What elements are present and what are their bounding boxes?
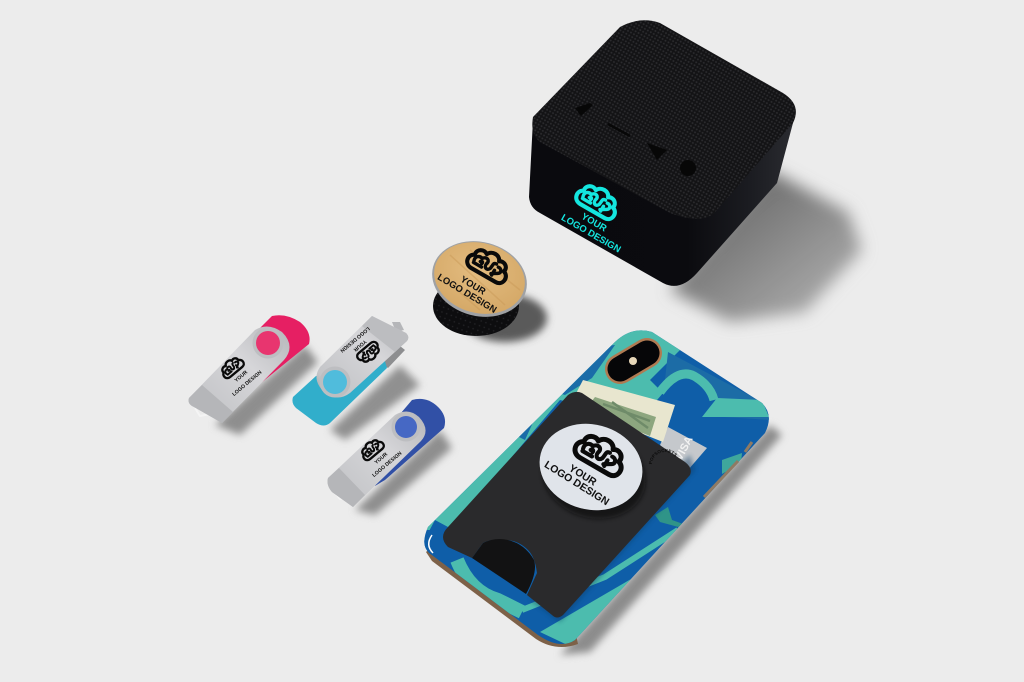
- teal key tab: [392, 322, 404, 332]
- blue body: [375, 399, 445, 486]
- pink label: YOUR: [234, 369, 249, 384]
- camera flash: [629, 357, 637, 365]
- phone case: [424, 330, 769, 644]
- white pop label: YOUR: [567, 462, 599, 489]
- speaker shadow: [670, 170, 862, 322]
- speaker buttons: [575, 103, 696, 176]
- blue label: YOUR: [374, 451, 389, 466]
- teal shadow: [330, 365, 420, 440]
- pink swivel: [189, 326, 290, 423]
- pop socket label: YOUR: [458, 274, 488, 298]
- speaker label: YOUR: [579, 211, 609, 235]
- white pop label: LOGO DESIGN: [542, 459, 611, 508]
- phone shadow: [560, 425, 782, 655]
- speaker body: [529, 120, 793, 286]
- blue key loop: [335, 493, 350, 499]
- pop socket base: [433, 276, 519, 336]
- speaker label: LOGO DESIGN: [559, 212, 623, 255]
- credit card: [660, 427, 707, 470]
- phone pop socket: [530, 412, 655, 530]
- blue logo: [358, 436, 385, 462]
- banknote paper: [570, 380, 675, 442]
- blue button: [395, 416, 417, 438]
- teal fold: [362, 316, 408, 352]
- teal button: [323, 370, 347, 394]
- blue button ring: [392, 412, 420, 442]
- wallet thumb slot: [472, 539, 535, 594]
- teal plug: [375, 342, 405, 368]
- blue label: LOGO DESIGN: [371, 451, 403, 479]
- USB drive: teal: [292, 316, 420, 440]
- money: [570, 380, 675, 442]
- card body: [660, 427, 707, 470]
- pink key loop: [195, 408, 210, 416]
- side buttons: [704, 442, 752, 497]
- pink label: LOGO DESIGN: [231, 370, 263, 398]
- teal label: LOGO DESIGN: [339, 325, 371, 353]
- pink fold: [189, 385, 233, 423]
- blue fold: [328, 468, 365, 507]
- pink logo: [218, 354, 245, 380]
- case pattern: [420, 325, 770, 650]
- phone edge: [426, 540, 578, 647]
- pink button ring: [252, 328, 284, 358]
- white pop logo: [572, 428, 630, 479]
- card wallet: [443, 392, 696, 624]
- USB drive: pink: [189, 315, 318, 435]
- white pop face: [530, 412, 652, 522]
- USB drive: blue: [328, 399, 452, 515]
- white pop shadow: [533, 422, 655, 530]
- banknote details: [603, 402, 650, 428]
- speaker mesh top: [532, 20, 796, 219]
- phone highlight: [429, 535, 433, 553]
- teal logo: [356, 340, 383, 366]
- pink shadow: [215, 345, 318, 435]
- camera lens housing: [620, 353, 647, 369]
- speaker: [529, 20, 862, 322]
- wallet body: [443, 392, 691, 618]
- blue shadow: [355, 430, 452, 515]
- teal swivel: [316, 316, 408, 398]
- product scene: [188, 20, 868, 659]
- teal label: YOUR: [352, 338, 367, 353]
- wooden pop socket: [424, 231, 547, 342]
- pink button: [256, 331, 280, 355]
- wallet brand ring: [649, 448, 677, 464]
- teal button ring: [320, 366, 350, 398]
- pop socket logo: [465, 243, 514, 286]
- pop socket rim: [424, 231, 535, 327]
- pop socket label: LOGO DESIGN: [435, 272, 498, 316]
- pop socket wood grain: [440, 250, 520, 310]
- banknote print: [585, 397, 656, 436]
- wallet shadow: [530, 455, 695, 622]
- teal body: [292, 358, 387, 426]
- phone camera: [620, 353, 647, 369]
- card text: VISA: [673, 434, 696, 463]
- speaker logo: [574, 179, 623, 222]
- pop socket wood face: [426, 232, 533, 324]
- pop socket shadow: [463, 294, 547, 342]
- wallet brand ring: POPSOCKETS POPSOCKETS: [649, 448, 677, 464]
- blue swivel: [328, 411, 426, 507]
- pink body: [225, 315, 310, 410]
- phone: [420, 325, 782, 655]
